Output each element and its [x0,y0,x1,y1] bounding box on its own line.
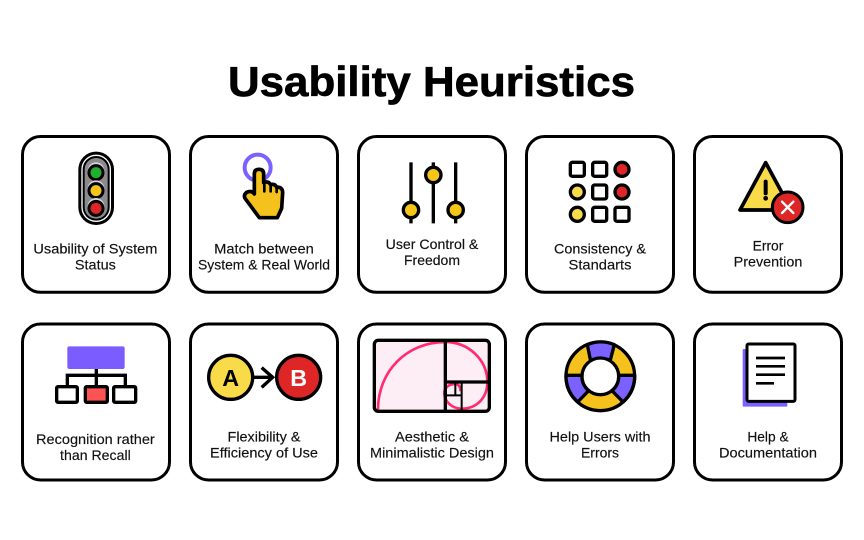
label: flexibility and efficiency of use [210,429,318,460]
label: match between system and real world [198,241,330,273]
label: help users with errors [550,429,650,460]
label: help and documentation: Help & [747,429,789,444]
icon: traffic light [78,152,114,225]
label: error prevention: Error [753,238,784,253]
icon: warning triangle with error badge [740,163,803,223]
panel: flexibility and efficiency of use [190,324,338,480]
label: aesthetic and minimalistic design: Aesthetic & [395,429,469,444]
panel: usability of system status [22,136,170,292]
panel: recognition rather than recall [22,324,170,480]
icon: lifebuoy [566,342,635,411]
icon: hierarchy diagram [57,346,136,402]
panel: match between system and real world [190,136,338,292]
label: consistency and standards: Standarts [568,258,632,273]
icon: grid of shapes [570,162,629,221]
label: error prevention [734,238,802,270]
icon: pointing hand [244,155,283,218]
panel: aesthetic and minimalistic design [358,324,506,480]
label: help users with errors: Help Users with [550,429,650,444]
panel: user control and freedom [358,136,506,292]
panel: error prevention [694,136,842,292]
label: aesthetic and minimalistic design [370,429,494,460]
icon: A to B flow: B [290,365,307,391]
panel: help users with errors [526,324,674,480]
label: recognition rather than recall: Recognition rather [36,432,155,447]
label: recognition rather than recall: than Recall [60,448,131,463]
label: help users with errors: Errors [581,445,619,460]
label: aesthetic and minimalistic design: Minimalistic Design [370,445,494,460]
label: help and documentation [719,429,817,460]
label: usability of system status [33,241,157,273]
label: match between system and real world: System & Real World [198,258,330,273]
label: recognition rather than recall [36,432,155,463]
label: help and documentation: Documentation [719,445,817,460]
label: match between system and real world: Match between [214,241,314,256]
panel: consistency and standards [526,136,674,292]
label: user control and freedom [386,237,478,268]
icon: A to B flow: A [222,365,239,391]
icon: sliders [403,162,463,223]
icon: golden ratio spiral [374,340,489,411]
label: user control and freedom: User Control & [386,237,478,252]
label: consistency and standards [554,241,646,273]
label: usability of system status: Status [75,258,116,273]
title: Usability Heuristics [228,58,635,105]
label: user control and freedom: Freedom [404,253,460,268]
label: error prevention: Prevention [734,255,802,270]
label: flexibility and efficiency of use: Efficiency of Use [210,445,318,460]
panel: help and documentation [694,324,842,480]
label: consistency and standards: Consistency & [554,241,646,256]
icon: document [743,344,795,407]
icon: A to B flow [209,355,321,399]
label: flexibility and efficiency of use: Flexibility & [228,429,300,444]
label: usability of system status: Usability of System [33,241,157,256]
